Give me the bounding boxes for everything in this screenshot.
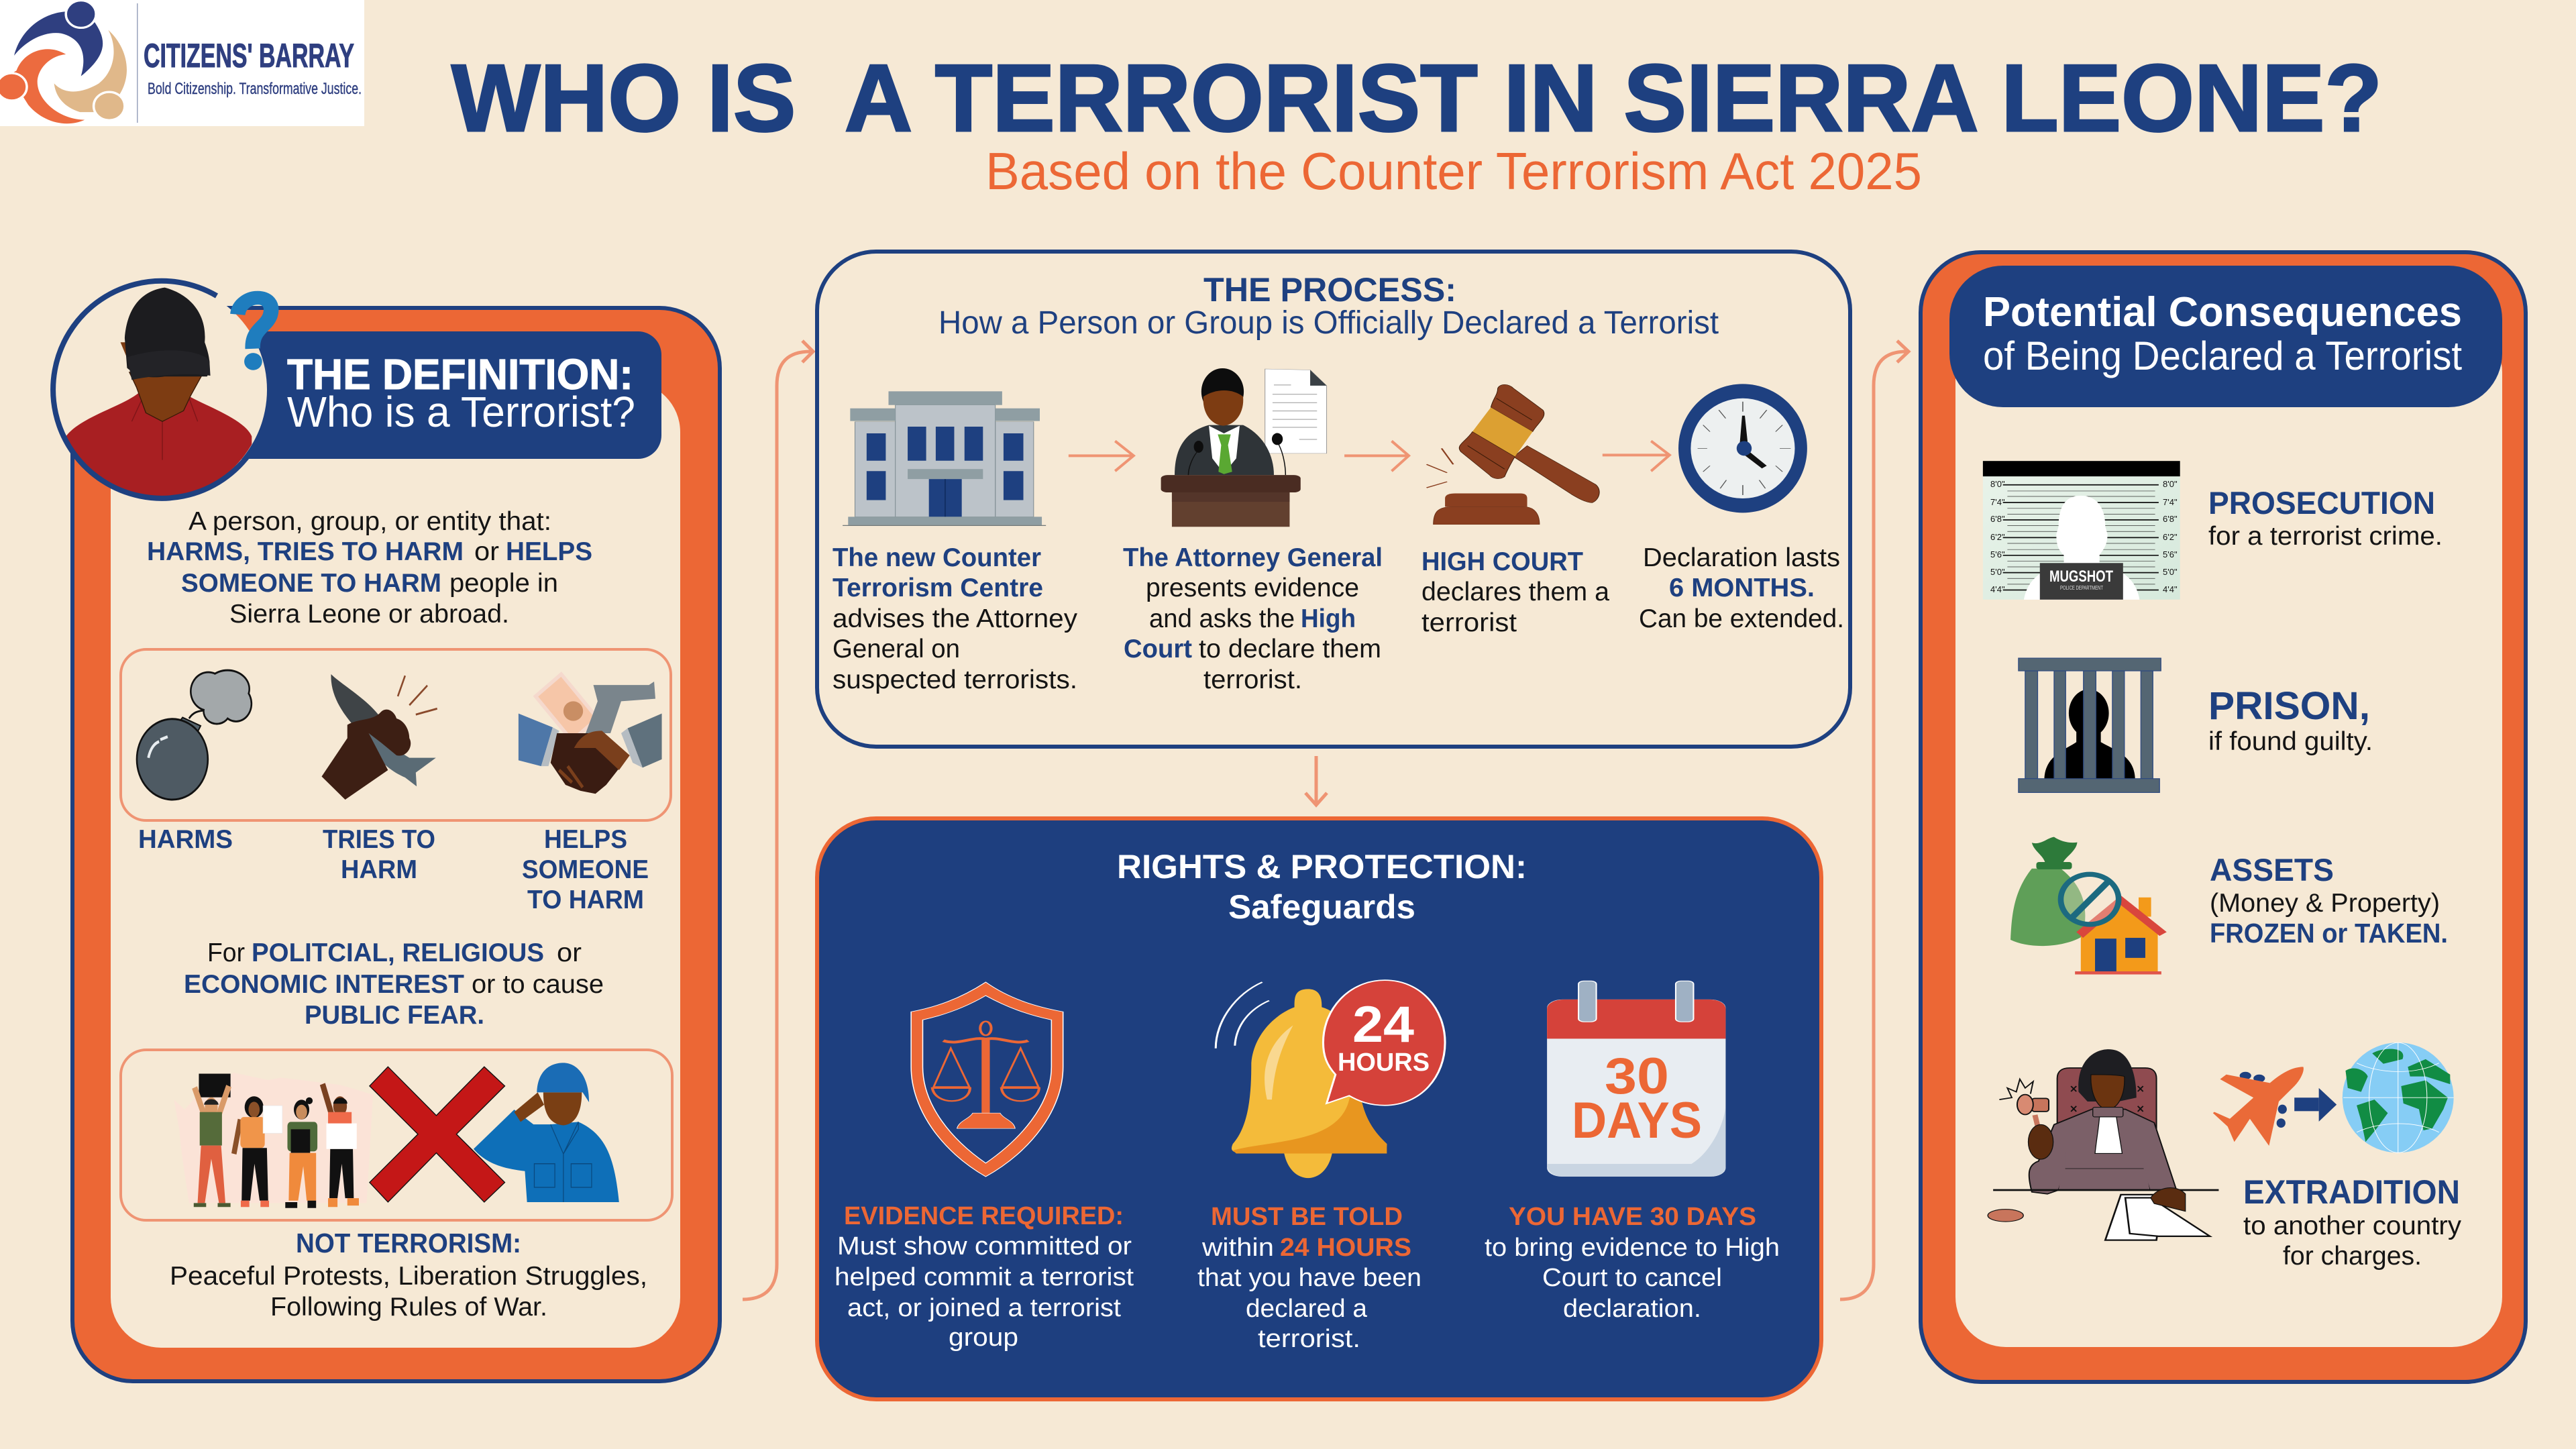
icon: shield with scales <box>911 982 1063 1177</box>
safeguard text: told: terrorist. <box>1258 1325 1360 1353</box>
safeguard text: 30 days: declaration. <box>1563 1295 1701 1323</box>
icon: attorney at podium <box>1161 368 1327 527</box>
safeguard text: 30 days: YOU HAVE 30 DAYS <box>1509 1203 1756 1231</box>
icon: plane to globe <box>2213 1042 2454 1152</box>
extradition text: to another country <box>2243 1212 2462 1240</box>
prison text: if found guilty. <box>2208 727 2373 756</box>
icon: saluting soldier <box>474 1063 619 1202</box>
calendar text: 30 days: DAYS <box>1572 1092 1702 1149</box>
icon: mugshot: 4'4" <box>2163 584 2178 594</box>
labels: acts: HARM <box>341 855 417 884</box>
panel: definition <box>52 281 720 1381</box>
labels: acts: TRIES TO <box>323 825 435 854</box>
labels: acts: TO HARM <box>527 885 644 914</box>
rights heading <box>1117 848 1527 926</box>
safeguard text: evidence <box>835 1202 1134 1352</box>
icon: bomb <box>137 669 252 800</box>
step 1 text: suspected terrorists. <box>833 665 1077 694</box>
icon: handshake with money and gun <box>519 674 662 794</box>
icon: question mark <box>237 298 271 370</box>
icon: clock <box>1678 384 1807 513</box>
logo: Citizens' Barray <box>0 0 364 126</box>
safeguard text: evidence: act, or joined a terrorist <box>847 1294 1121 1322</box>
step 2 text <box>1123 543 1383 694</box>
panel: potential consequences <box>1921 252 2526 1382</box>
step 1 text: Terrorism Centre <box>833 574 1043 602</box>
step 3 text: declares them a <box>1421 578 1609 606</box>
definition text: Sierra Leone or abroad. <box>229 600 509 629</box>
prosecution text <box>2208 485 2443 551</box>
icon: calendar <box>1547 981 1725 1177</box>
not terrorism text: Following Rules of War. <box>270 1293 547 1322</box>
step 1 text: General on <box>833 635 960 663</box>
process heading: THE PROCESS: <box>1203 271 1456 309</box>
prosecution text: for a terrorist crime. <box>2208 522 2443 551</box>
motive text: POLITCIAL, RELIGIOUS <box>252 938 544 967</box>
calendar text: 30 days <box>1572 1048 1702 1149</box>
icon: red cross <box>370 1067 504 1202</box>
safeguard text: told: MUST BE TOLD <box>1211 1203 1403 1231</box>
step 2 text: presents evidence <box>1146 574 1359 602</box>
icon: 24 hours badge <box>1323 980 1445 1106</box>
icon: mugshot: 8'0" <box>1990 479 2005 489</box>
icon: protesters <box>174 1073 373 1208</box>
safeguard text: 30 days: to bring evidence to High <box>1485 1234 1780 1262</box>
subtitle: Based on the Counter Terrorism Act 2025 <box>985 142 1922 201</box>
icon: mugshot: MUGSHOT <box>2049 568 2113 586</box>
definition text: or <box>474 537 499 566</box>
definition heading <box>201 331 661 459</box>
badge text: 24 hours: HOURS <box>1338 1049 1430 1077</box>
step 4 text: 6 MONTHS. <box>1669 574 1815 602</box>
icon: money bag and house <box>2010 837 2167 975</box>
step 3 text: HIGH COURT <box>1421 547 1583 576</box>
motive text: ECONOMIC INTEREST <box>184 970 464 999</box>
motive text: For <box>207 938 245 967</box>
safeguard text: evidence: helped commit a terrorist <box>835 1263 1134 1291</box>
arrow: step 2 to step 3 <box>1344 441 1409 471</box>
icon: bell <box>1216 982 1387 1178</box>
step 2 text: Court <box>1124 635 1192 663</box>
step 4 text: Can be extended. <box>1639 604 1844 633</box>
step 2 text: to declare them <box>1199 635 1381 663</box>
logo: Citizens' Barray: CITIZENS' BARRAY <box>144 37 354 74</box>
step 1 text: The new Counter <box>833 543 1041 572</box>
consequences heading: of Being Declared a Terrorist <box>1983 333 2462 378</box>
step 4 text: Declaration lasts <box>1643 543 1840 572</box>
prison text: PRISON, <box>2208 684 2370 728</box>
icon: mugshot: 6'2" <box>1990 532 2005 542</box>
motive text: PUBLIC FEAR. <box>305 1001 484 1030</box>
definition text: SOMEONE TO HARM <box>181 569 441 598</box>
motive text: or to cause <box>472 970 604 999</box>
icon: mugshot: 4'4" <box>1990 584 2005 594</box>
icon: gavel <box>1427 384 1599 525</box>
step 2 text: terrorist. <box>1203 665 1302 694</box>
consequences heading <box>1949 266 2502 407</box>
icon: judge with gavel <box>1988 1049 2218 1240</box>
extradition text: EXTRADITION <box>2243 1173 2460 1211</box>
step 3 text: terrorist <box>1421 608 1517 637</box>
title: WHO IS A TERRORIST IN SIERRA LEONE? <box>451 45 2382 152</box>
assets text: ASSETS <box>2210 852 2334 888</box>
definition text: A person, group, or entity that: <box>189 507 551 536</box>
badge text: 24 hours <box>1338 996 1430 1077</box>
rights heading: Safeguards <box>1228 888 1415 926</box>
icon: mugshot: 7'4" <box>1990 497 2005 507</box>
icon: mugshot: 5'6" <box>2163 549 2178 559</box>
safeguard text: evidence: Must show committed or <box>837 1232 1132 1260</box>
connector arrow: process to rights <box>1305 756 1327 805</box>
icon: building <box>843 391 1046 526</box>
not terrorism text: Peaceful Protests, Liberation Struggles, <box>170 1262 647 1291</box>
safeguard text: told: 24 HOURS <box>1280 1234 1411 1262</box>
icon: prison bars <box>2019 658 2161 792</box>
extradition text: for charges. <box>2283 1242 2422 1271</box>
panel: the process <box>817 252 1850 747</box>
process heading <box>938 271 1719 341</box>
icon: mugshot: 5'0" <box>1990 567 2005 577</box>
icon: mugshot: 5'0" <box>2163 567 2178 577</box>
rights heading: RIGHTS & PROTECTION: <box>1117 848 1527 885</box>
icon: hooded person in circle <box>52 281 267 500</box>
labels: acts: SOMEONE <box>522 855 649 884</box>
safeguard text: 30 days: Court to cancel <box>1542 1264 1722 1292</box>
assets text: FROZEN or TAKEN. <box>2210 918 2448 949</box>
step 2 text: and asks the <box>1149 604 1295 633</box>
consequences heading: Potential Consequences <box>1983 289 2462 335</box>
arrow: step 3 to step 4 <box>1603 441 1670 471</box>
step 2 text: High <box>1301 604 1356 633</box>
prosecution text: PROSECUTION <box>2208 485 2435 521</box>
icon: mugshot: 6'8" <box>1990 514 2005 524</box>
safeguard text: told: that you have been <box>1197 1264 1421 1292</box>
definition text: HELPS <box>506 537 592 566</box>
connector arrow: process to consequences <box>1840 341 1909 1299</box>
not terrorism text <box>170 1228 647 1322</box>
definition heading: Who is a Terrorist? <box>287 388 635 436</box>
step 2 text: The Attorney General <box>1123 543 1383 572</box>
prison text <box>2208 684 2373 756</box>
labels: acts: HELPS <box>544 825 627 854</box>
icon: mugshot: 7'4" <box>2163 497 2178 507</box>
arrow: step 1 to step 2 <box>1069 441 1134 471</box>
step 4 text <box>1639 543 1844 633</box>
badge text: 24 hours: 24 <box>1352 996 1414 1053</box>
assets text <box>2210 852 2448 949</box>
icon: mugshot: 6'2" <box>2163 532 2178 542</box>
icon: knife in hand <box>321 674 437 800</box>
extradition text <box>2243 1173 2462 1271</box>
safeguard text: evidence: EVIDENCE REQUIRED: <box>844 1202 1124 1230</box>
definition text: HARMS, TRIES TO HARM <box>147 537 464 566</box>
definition text: people in <box>449 569 558 598</box>
box: acts icons <box>121 649 671 820</box>
calendar text: 30 days: 30 <box>1605 1048 1669 1105</box>
safeguard text: told <box>1197 1203 1421 1353</box>
process heading: How a Person or Group is Officially Declared a Terrorist <box>938 305 1719 341</box>
motive text <box>184 938 604 1030</box>
box: not terrorism icons <box>121 1050 672 1220</box>
motive text: or <box>557 938 582 967</box>
safeguard text: 30 days <box>1485 1203 1780 1323</box>
panel: rights and protection <box>817 818 1821 1399</box>
connector arrow: definition to process <box>743 341 813 1299</box>
icon: mugshot: 6'8" <box>2163 514 2178 524</box>
safeguard text: told: within <box>1201 1234 1274 1262</box>
labels: acts <box>138 825 649 914</box>
safeguard text: told: declared a <box>1246 1295 1368 1323</box>
safeguard text: evidence: group <box>949 1324 1018 1352</box>
definition text <box>147 507 592 629</box>
assets text: (Money & Property) <box>2210 889 2440 918</box>
icon: mugshot: 8'0" <box>2163 479 2178 489</box>
step 3 text <box>1421 547 1609 637</box>
labels: acts: HARMS <box>138 825 233 854</box>
icon: mugshot: 5'6" <box>1990 549 2005 559</box>
not terrorism text: NOT TERRORISM: <box>296 1228 521 1258</box>
definition heading: THE DEFINITION: <box>287 350 633 398</box>
step 1 text <box>833 543 1078 694</box>
step 1 text: advises the Attorney <box>833 604 1078 633</box>
icon: mugshot: POLICE DEPARTMENT <box>2060 585 2103 591</box>
icon: mugshot <box>1983 461 2180 600</box>
logo: Citizens' Barray: Bold Citizenship. Transformative Justice. <box>148 80 362 98</box>
